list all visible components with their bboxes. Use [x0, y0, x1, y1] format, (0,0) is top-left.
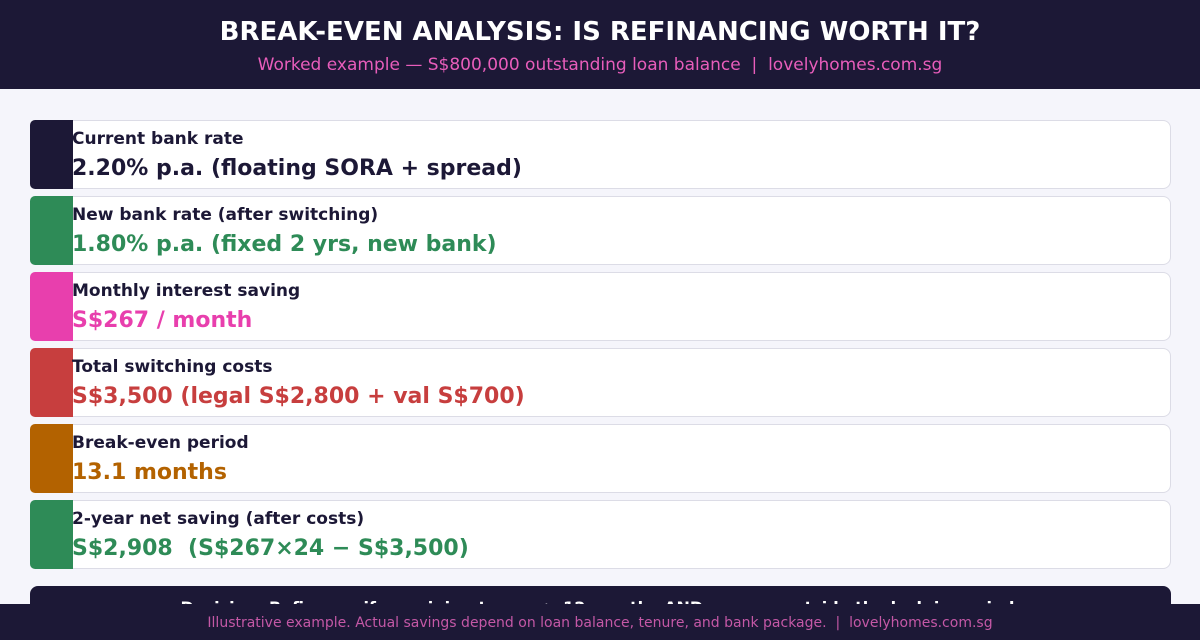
row: 2-year net saving: [30, 500, 1171, 569]
row: total switching costs: [30, 348, 1171, 417]
row: current bank rate: 2.20% p.a. (floating SORA + spread): [72, 156, 522, 181]
footer band: [0, 604, 1200, 640]
subtitle: Worked example — S$800,000 outstanding loan balance | lovelyhomes.com.sg: [258, 55, 942, 75]
row: monthly interest saving: [30, 272, 1171, 341]
row: break-even period: 13.1 months: [72, 460, 227, 485]
decision text: Decision: Refinance if remaining tenure > 12 months AND you are outside the lock-in period.: [181, 598, 1020, 617]
title: BREAK-EVEN ANALYSIS: IS REFINANCING WORTH IT?: [220, 17, 980, 47]
row: break-even period: [30, 424, 1171, 493]
row: new bank rate: New bank rate (after switching): [72, 205, 378, 225]
row: monthly interest saving: Monthly interest saving: [72, 281, 300, 301]
footer text: Illustrative example. Actual savings depend on loan balance, tenure, and bank package. | lovelyhomes.com.sg: [207, 615, 993, 631]
row: current bank rate: [30, 120, 1171, 189]
row: 2-year net saving: S$2,908 (S$267×24 − S$3,500): [72, 536, 469, 561]
row: new bank rate: 1.80% p.a. (fixed 2 yrs, new bank): [72, 232, 497, 257]
row: 2-year net saving: 2-year net saving (after costs): [72, 509, 364, 529]
row: monthly interest saving: S$267 / month: [72, 308, 252, 333]
row: total switching costs: S$3,500 (legal S$2,800 + val S$700): [72, 384, 525, 409]
decision callout: [30, 586, 1171, 640]
row: total switching costs: Total switching costs: [72, 357, 272, 377]
header band: [0, 0, 1200, 89]
row: current bank rate: Current bank rate: [72, 129, 244, 149]
row: break-even period: Break-even period: [72, 433, 249, 453]
row: new bank rate: [30, 196, 1171, 265]
